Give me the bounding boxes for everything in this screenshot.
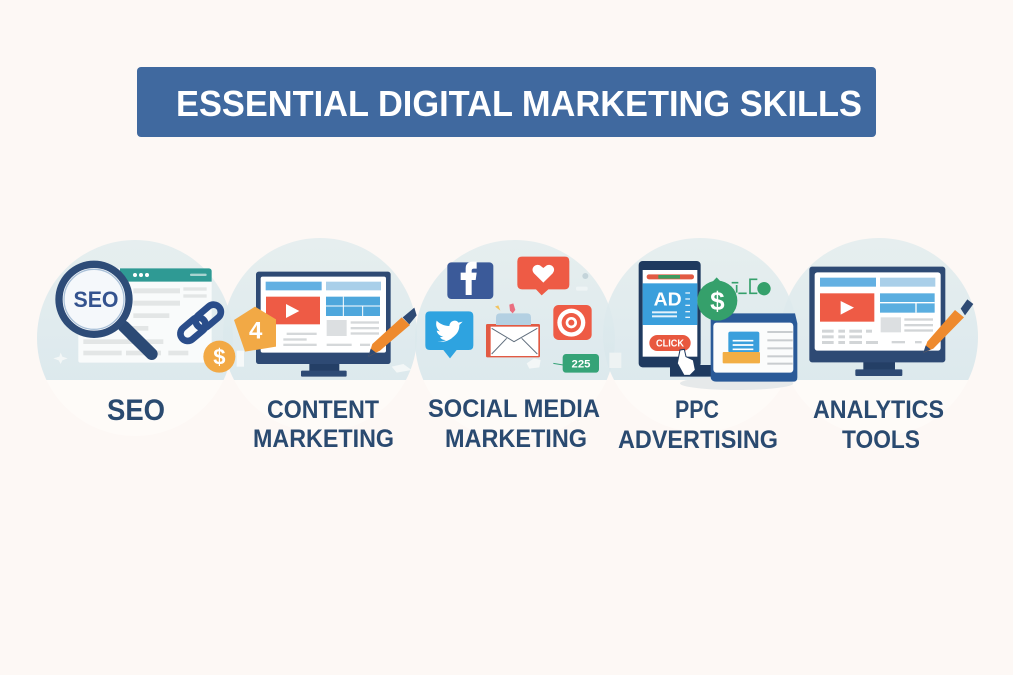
label: content marketing — [253, 396, 394, 453]
label: PPC advertising — [618, 396, 778, 454]
icon: SEO magnifier, browser, link and coin: SEO — [73, 287, 118, 312]
icon: social icons — [425, 257, 599, 373]
label: analytics tools — [813, 396, 944, 454]
icon: SEO magnifier, browser, link and coin — [53, 264, 235, 373]
panel: content marketing — [228, 238, 417, 380]
panel: analytics tools — [789, 238, 978, 380]
label: SEO: SEO — [107, 394, 165, 427]
label: social media marketing — [428, 395, 600, 453]
label: PPC advertising: ADVERTISING — [618, 426, 778, 454]
label: content marketing: CONTENT — [267, 396, 379, 424]
label: analytics tools: ANALYTICS — [813, 396, 944, 424]
icon: analytics monitor and pen — [809, 267, 973, 376]
label: PPC advertising: PPC — [675, 396, 719, 424]
title text: ESSENTIAL DIGITAL MARKETING SKILLS — [176, 83, 862, 124]
icon: phone, coin and ad window: CLICK — [656, 338, 685, 349]
icon: pentagon badge — [234, 307, 276, 352]
label: social media marketing: SOCIAL MEDIA — [428, 395, 600, 423]
icon: social icons: 225 — [572, 358, 590, 370]
icon: phone, coin and ad window: $ — [710, 286, 725, 316]
icon: content monitor — [234, 272, 417, 377]
label: social media marketing: MARKETING — [445, 425, 587, 453]
icon: pen — [368, 308, 417, 357]
label: analytics tools: TOOLS — [842, 426, 920, 454]
panel: social media marketing — [416, 240, 610, 380]
panel: SEO — [37, 240, 236, 380]
panel: PPC advertising — [608, 238, 798, 390]
icon: phone, coin and ad window: AD — [654, 288, 682, 309]
label: content marketing: MARKETING — [253, 425, 394, 453]
title banner — [137, 67, 876, 137]
icon: pentagon badge: 4 — [249, 318, 263, 345]
icon: SEO magnifier, browser, link and coin: $ — [213, 345, 225, 370]
icon: phone, coin and ad window — [609, 261, 797, 390]
